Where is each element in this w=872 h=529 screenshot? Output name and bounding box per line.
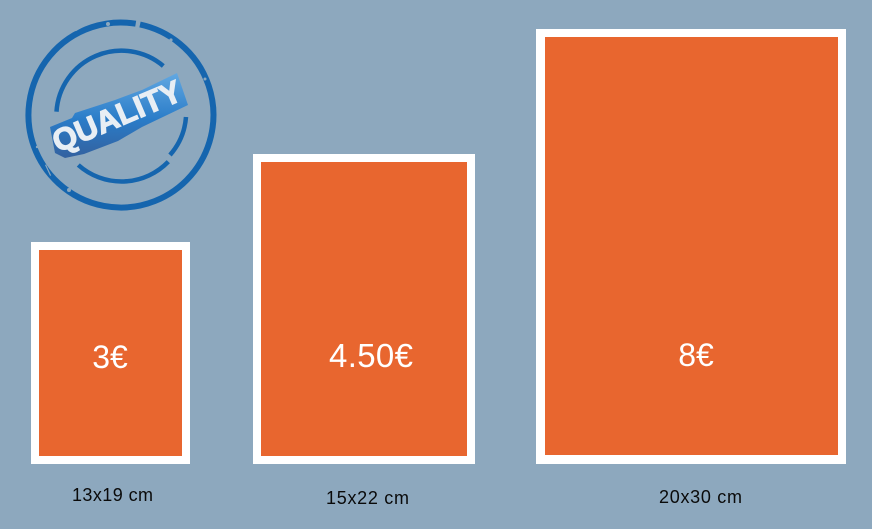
large print fill	[545, 37, 838, 455]
panel: small print 13x19	[31, 242, 190, 464]
medium print size label: 15x22 cm	[326, 488, 409, 508]
medium print frame	[253, 154, 475, 464]
medium print fill	[261, 162, 467, 456]
medium print price: 4.50€	[329, 337, 413, 374]
small print size label: 13x19 cm	[72, 485, 153, 505]
panel: medium print 15x22	[253, 154, 475, 464]
stamp banner	[50, 73, 188, 158]
stamp banner text: QUALITY	[47, 73, 187, 159]
panel: large print 20x30	[536, 29, 846, 464]
large print frame	[536, 29, 846, 464]
stamp outer ring	[28, 23, 213, 208]
large print price: 8€	[678, 337, 714, 373]
stamp wear marks	[36, 22, 206, 198]
large print size label: 20x30 cm	[659, 487, 742, 507]
small print fill	[39, 250, 182, 456]
stamp inner ring arcs	[56, 51, 186, 182]
icon: quality stamp	[28, 22, 213, 208]
small print frame	[31, 242, 190, 464]
small print price: 3€	[92, 339, 128, 375]
